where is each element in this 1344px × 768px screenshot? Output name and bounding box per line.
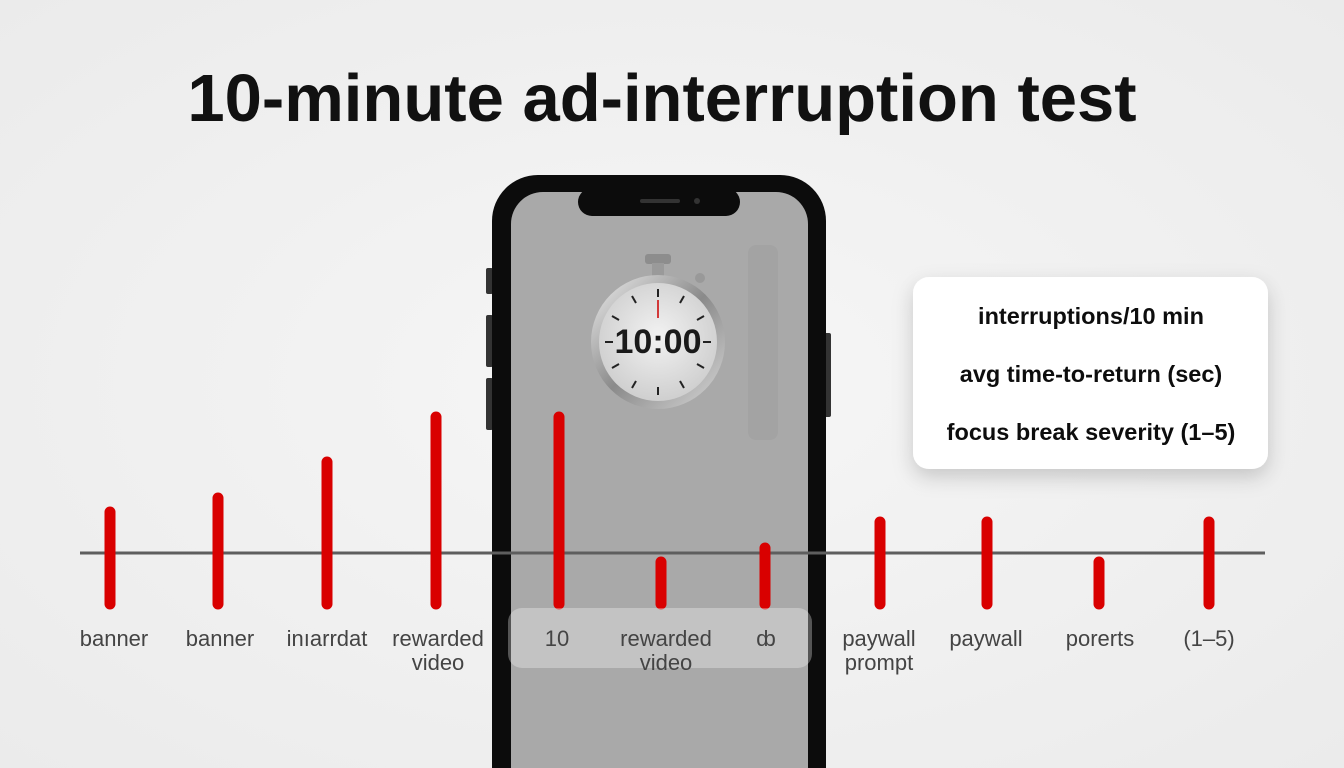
- icon: stopwatch: [591, 254, 725, 409]
- axis labels: video: [412, 650, 464, 675]
- axis labels: paywall: [842, 626, 916, 651]
- axis labels: video: [640, 650, 692, 675]
- metric 3: focus break severity (1–5): [947, 419, 1235, 445]
- axis labels: rewarded: [620, 626, 712, 651]
- phone: [486, 175, 831, 768]
- axis labels: 10: [545, 626, 569, 651]
- axis labels: porerts: [1066, 626, 1134, 651]
- axis labels: paywall: [949, 626, 1023, 651]
- axis labels: banner: [80, 626, 148, 651]
- axis labels: banner: [186, 626, 254, 651]
- metric 1: interruptions/10 min: [978, 303, 1204, 329]
- axis labels: ȸ: [756, 626, 776, 651]
- axis labels: inıarrdat: [287, 626, 367, 651]
- axis labels: (1–5): [1183, 626, 1235, 651]
- axis labels: [80, 626, 1235, 675]
- axis labels: prompt: [845, 650, 913, 675]
- icon: stopwatch: 10:00: [615, 323, 701, 361]
- axis labels: rewarded: [392, 626, 484, 651]
- metric 2: avg time-to-return (sec): [960, 361, 1222, 387]
- title: 10-minute ad-interruption test: [187, 61, 1137, 136]
- bar chart: interruption spikes: [110, 417, 1209, 604]
- label highlight box: [508, 608, 812, 668]
- baseline: [80, 552, 1265, 554]
- card: metrics: [913, 277, 1268, 469]
